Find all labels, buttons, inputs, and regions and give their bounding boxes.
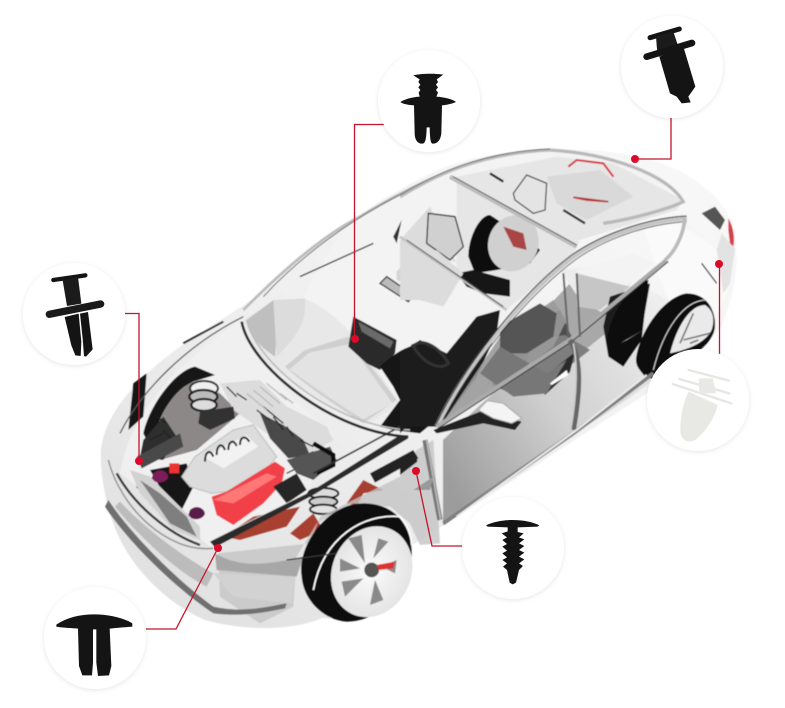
spare wheel [468,208,547,279]
callout: top center clip [378,50,480,152]
A pillar sweep [437,218,687,427]
steering and seat dark [380,343,440,433]
hood arc dark edge [242,322,408,437]
A-pillar left [243,175,440,310]
engine bay interior [160,382,240,460]
front wheel [301,503,427,631]
rear seat and console [457,270,510,297]
seat vent [380,277,413,302]
roof frame [400,150,683,223]
rear section detail [400,149,735,523]
rear interior bright [577,253,653,297]
leader lines [125,118,720,629]
callout: faded rear clip [647,349,749,451]
roof red trim [568,160,613,177]
dashboard dark panel [348,317,397,370]
front section detail [105,175,440,631]
rear wheel [636,293,715,380]
red suspension detail [223,480,383,540]
line: roof clip [635,118,671,159]
engine cover silver [182,425,277,493]
engine clutter strokes [137,387,327,530]
fender panel [218,440,440,623]
callout: top right clip [621,16,723,118]
rear bench and sunroof tone [547,170,633,220]
lower wheel arch line [287,553,337,560]
red engine block [212,462,285,525]
cabin dark interior [400,310,500,433]
rear C pillar [665,218,685,260]
roof cabin glass [300,152,680,420]
coil spring [189,381,235,430]
vent gills [400,455,417,475]
rear seat interior dark area [500,278,625,395]
wing mirror [433,401,522,433]
waistline rail [437,260,667,427]
front dash and cowl [243,298,400,425]
door streak [550,370,568,385]
callout: left clip [23,263,125,365]
line: fender clip [416,471,463,546]
line: bumper clip [146,548,218,629]
taillight detail [702,207,725,230]
anchor dots [135,155,723,552]
rear body white highlight [640,215,733,340]
line: dashboard clip [354,124,384,339]
B pillar [570,340,579,430]
car body silhouette [101,149,737,628]
right wheel well shadow [143,367,215,443]
windshield rear glass [457,157,683,310]
rear wheel inner [607,280,648,367]
callout: bottom left clip [44,587,146,689]
hoses [313,443,333,473]
hood glass [120,317,333,547]
strut spring near wheel [308,488,338,514]
seat backrest front [397,247,440,287]
rocker lower edge [443,373,653,523]
car illustration [101,149,737,631]
arm chassis bars [210,435,408,547]
bumper lower stripes [105,500,287,615]
callout: bottom center clip [462,497,564,599]
radiator left dark pipes [137,433,183,468]
line: rear clip [718,264,720,354]
line: engine bay clip [125,314,139,461]
door side panel [443,285,690,525]
